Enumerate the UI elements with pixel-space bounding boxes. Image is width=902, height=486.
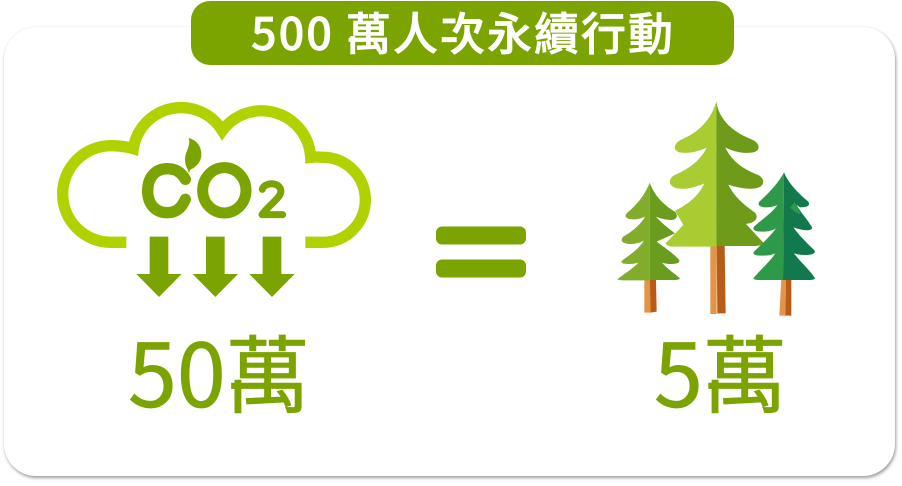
cloud outline [63,108,365,242]
small left tree [617,183,680,313]
arrows [136,237,295,297]
icon: three pine trees [617,101,815,316]
right figure: 50k: 萬 [703,310,787,431]
small right tree [753,172,815,316]
left figure: 500k: 萬 [226,310,310,431]
right figure: 50k: 5 [654,306,703,433]
icon: CO2 cloud with down arrows [63,108,365,297]
icon: equals sign [436,226,526,278]
heading pill background [191,1,734,65]
left figure: 500k: 50 [128,306,226,433]
CO2 letters [148,168,283,215]
leaf [185,138,201,173]
large tree [666,101,763,314]
